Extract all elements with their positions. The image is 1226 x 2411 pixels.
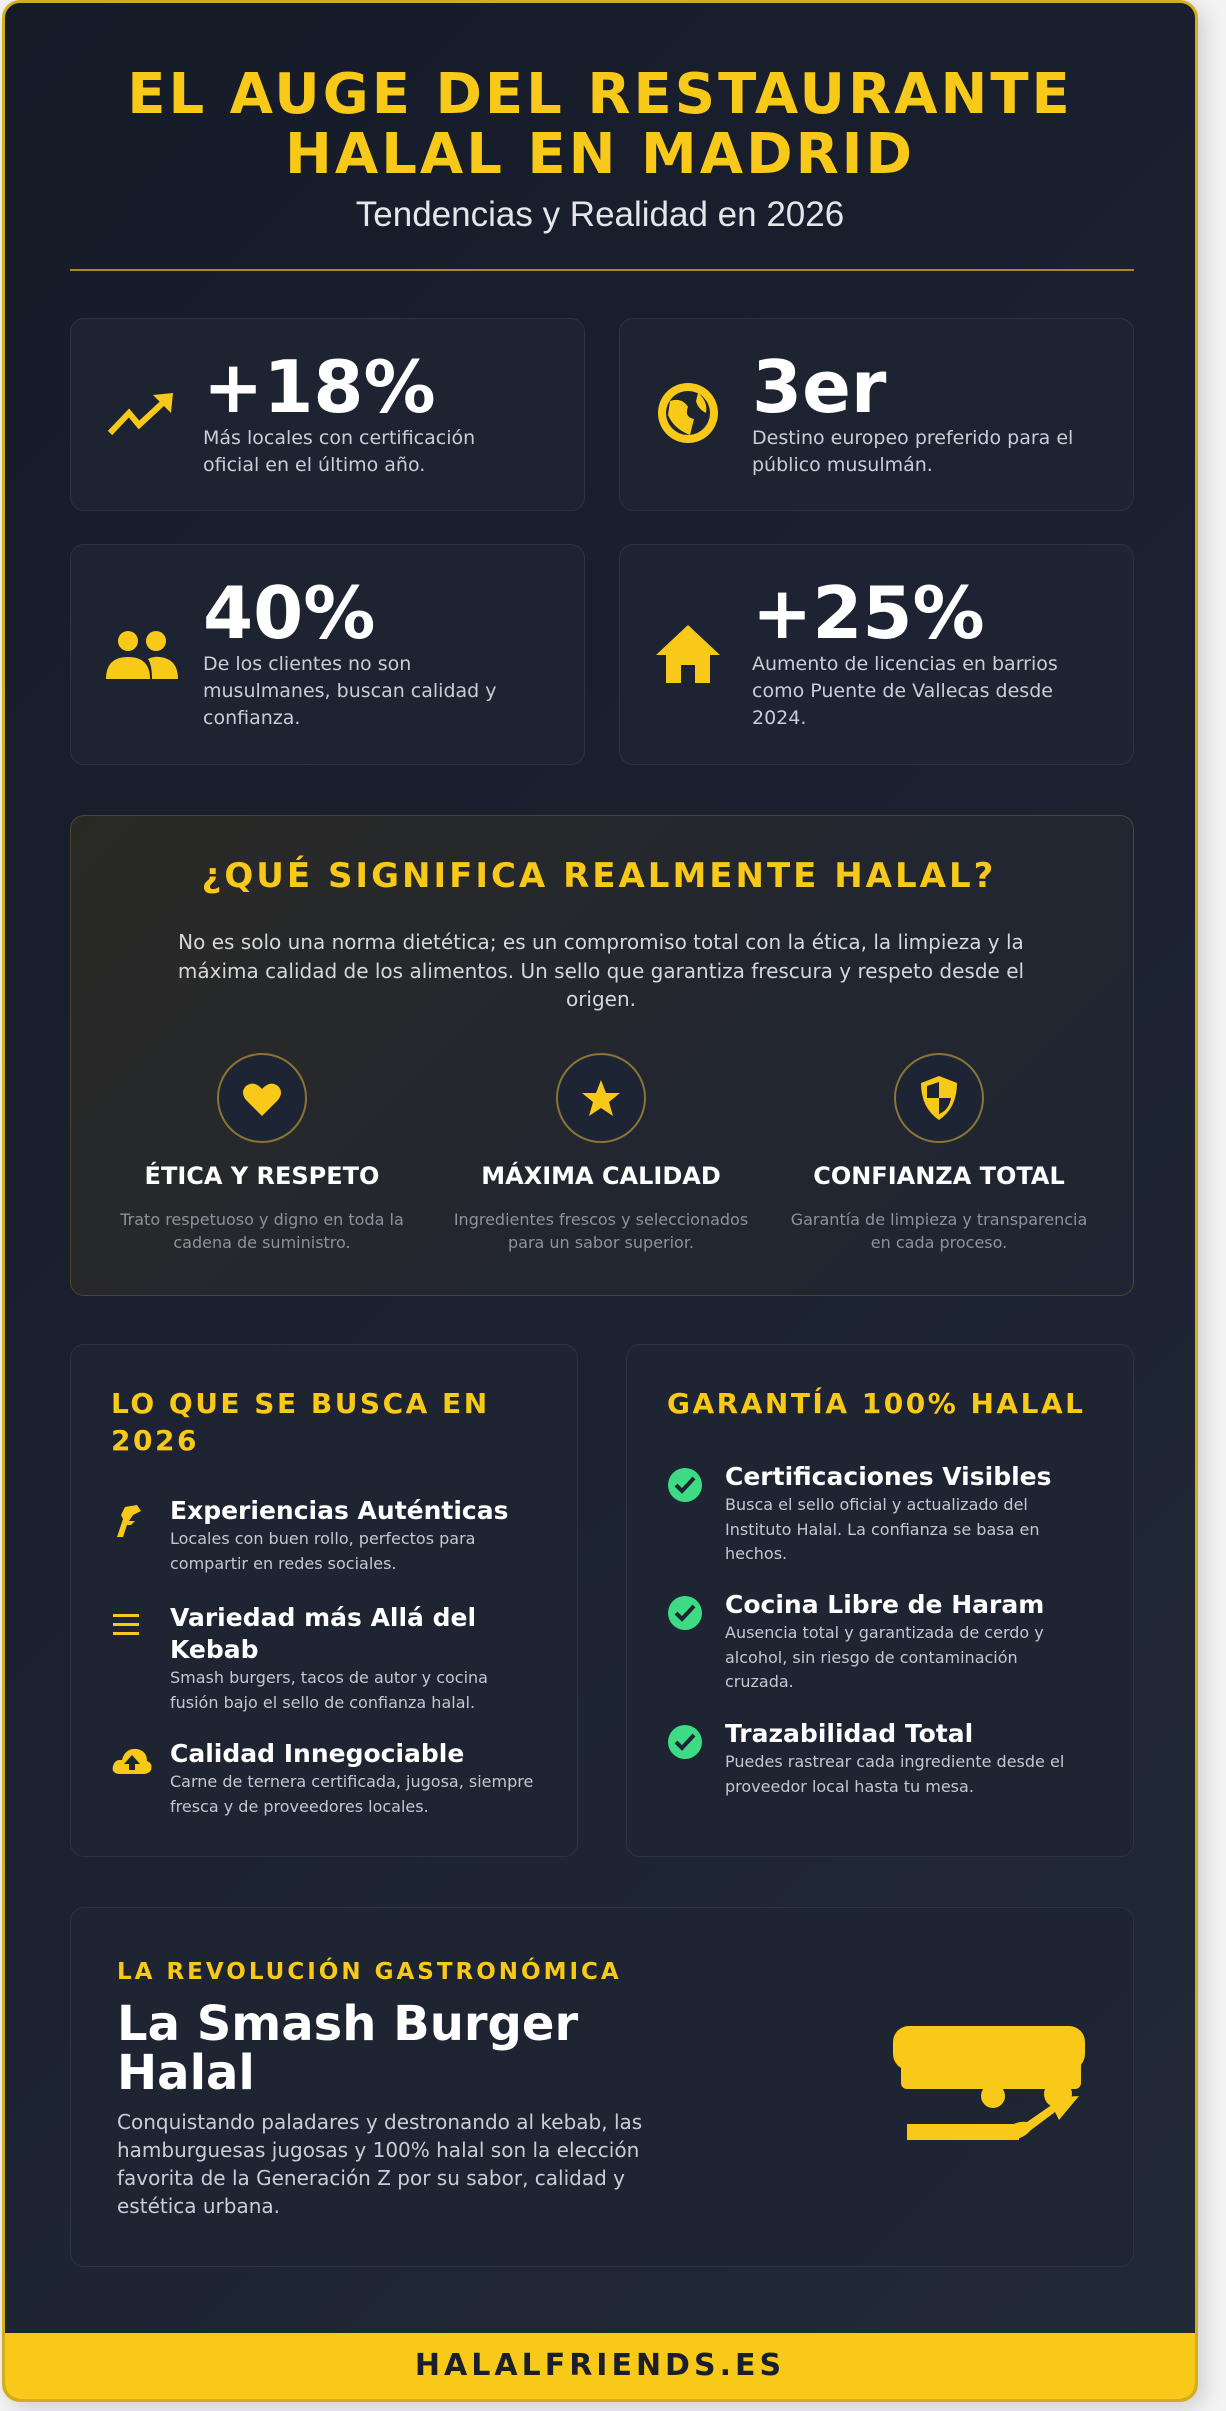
heading xyxy=(111,1387,490,1457)
pillar: quality: Ingredientes frescos y seleccionados xyxy=(454,1210,748,1229)
item: certifications: hechos. xyxy=(725,1544,787,1563)
title: EL AUGE DEL RESTAURANTE xyxy=(127,62,1073,127)
footer xyxy=(5,2333,1195,2405)
burger text: Conquistando paladares y destronando al kebab, las hamburguesas jugosas y 100% halal son la elección favorita de la Generación Z por su sabor, calidad y estética urbana. xyxy=(117,2110,642,2218)
item: certifications: Busca el sello oficial y actualizado del xyxy=(725,1495,1028,1514)
item: certifications xyxy=(668,1462,1052,1563)
item: variety: Smash burgers, tacos de autor y cocina xyxy=(170,1668,488,1687)
heading: 2026 xyxy=(111,1424,199,1457)
stat card: 3er: público musulmán. xyxy=(752,454,933,476)
heading: LO QUE SE BUSCA EN xyxy=(111,1387,490,1420)
stat card: 40%: confianza. xyxy=(203,707,300,729)
panel: smash burger xyxy=(70,1907,1134,2267)
stat card: +25% xyxy=(619,544,1134,765)
item: traceability xyxy=(668,1719,1064,1796)
panel: guarantee xyxy=(626,1344,1134,1857)
heading: GARANTÍA 100% HALAL xyxy=(667,1387,1085,1420)
heading: ¿QUÉ SIGNIFICA REALMENTE HALAL? xyxy=(202,856,996,896)
stat card: +25%: como Puente de Vallecas desde xyxy=(752,680,1053,702)
stat card: +18% xyxy=(70,318,585,511)
item: experiences xyxy=(117,1496,508,1572)
item: haram free: alcohol, sin riesgo de contaminación xyxy=(725,1648,1018,1666)
panel: what people seek xyxy=(70,1344,578,1857)
icon: people xyxy=(106,631,178,679)
pillar: ethics xyxy=(120,1053,404,1252)
icon: house xyxy=(656,625,720,683)
stat card: 40%: musulmanes, buscan calidad y xyxy=(203,680,496,702)
pillar: trust: CONFIANZA TOTAL xyxy=(813,1162,1065,1190)
item: traceability: proveedor local hasta tu mesa. xyxy=(725,1776,974,1796)
item: quality: Calidad Innegociable xyxy=(170,1739,464,1768)
item: certifications: Instituto Halal. La confianza se basa en xyxy=(725,1520,1039,1538)
pillar: trust: Garantía de limpieza y transparencia xyxy=(791,1210,1087,1229)
item: haram free: cruzada. xyxy=(725,1672,794,1691)
item: variety xyxy=(113,1603,488,1712)
icon: trend xyxy=(108,393,173,436)
stat card: +25%: 2024. xyxy=(752,707,806,729)
burger title: La Smash Burger xyxy=(117,1996,578,2052)
pillar: ethics: ÉTICA Y RESPETO xyxy=(145,1162,379,1190)
footer: HALALFRIENDS.ES xyxy=(415,2348,785,2383)
icon: globe xyxy=(658,383,718,443)
icon: shield xyxy=(894,1053,984,1143)
item: haram free xyxy=(668,1590,1044,1691)
item: variety: Variedad más Allá del xyxy=(170,1603,476,1632)
item: experiences: Experiencias Auténticas xyxy=(170,1496,508,1525)
item: variety: fusión bajo el sello de confianza halal. xyxy=(170,1692,475,1712)
stat card: +18%: Más locales con certificación xyxy=(203,427,475,449)
stat card: +18%: +18% xyxy=(203,345,436,429)
stat card: 3er: 3er xyxy=(752,345,886,429)
burger title: Halal xyxy=(117,2045,255,2101)
item: quality: fresca y de proveedores locales. xyxy=(170,1796,429,1816)
title: HALAL EN MADRID xyxy=(285,122,915,187)
stat card: +18%: oficial en el último año. xyxy=(203,454,425,476)
item: variety: Kebab xyxy=(170,1635,259,1664)
item: experiences: Locales con buen rollo, perfectos para xyxy=(170,1529,475,1548)
burger title xyxy=(117,1996,578,2101)
stat card: +25%: Aumento de licencias en barrios xyxy=(752,653,1058,675)
icon: burger xyxy=(893,2026,1085,2140)
item: experiences: compartir en redes sociales. xyxy=(170,1554,397,1572)
pillar: quality xyxy=(454,1053,748,1252)
item: quality xyxy=(112,1739,533,1816)
item: traceability: Trazabilidad Total xyxy=(725,1719,973,1748)
pillar: ethics: cadena de suministro. xyxy=(173,1233,351,1252)
item: haram free: Ausencia total y garantizada de cerdo y xyxy=(725,1623,1044,1642)
stat card: 3er xyxy=(619,318,1134,511)
intro text: No es solo una norma dietética; es un compromiso total con la ética, la limpieza y la máxima calidad de los alimentos. Un sello que garantiza frescura y respeto desde el origen. xyxy=(178,930,1024,1011)
icon: heart xyxy=(217,1053,307,1143)
item: certifications: Certificaciones Visibles xyxy=(725,1462,1052,1491)
panel: what is halal xyxy=(70,815,1134,1296)
item: haram free: Cocina Libre de Haram xyxy=(725,1590,1044,1619)
stat card: +25%: +25% xyxy=(752,571,985,655)
title xyxy=(127,62,1073,187)
kicker: LA REVOLUCIÓN GASTRONÓMICA xyxy=(117,1959,622,1985)
pillar: trust: en cada proceso. xyxy=(871,1233,1007,1252)
pillar: ethics: Trato respetuoso y digno en toda la xyxy=(120,1210,404,1229)
stat card: 40%: 40% xyxy=(203,571,375,655)
pillar: quality: para un sabor superior. xyxy=(508,1233,694,1252)
stat card: 40%: De los clientes no son xyxy=(203,653,411,675)
item: traceability: Puedes rastrear cada ingrediente desde el xyxy=(725,1752,1064,1771)
stat card: 40% xyxy=(70,544,585,765)
pillar: quality: MÁXIMA CALIDAD xyxy=(481,1162,721,1190)
item: quality: Carne de ternera certificada, jugosa, siempre xyxy=(170,1772,533,1791)
subtitle: Tendencias y Realidad en 2026 xyxy=(356,195,844,234)
icon: star xyxy=(556,1053,646,1143)
pillar: trust xyxy=(791,1053,1087,1252)
stat card: 3er: Destino europeo preferido para el xyxy=(752,427,1073,449)
